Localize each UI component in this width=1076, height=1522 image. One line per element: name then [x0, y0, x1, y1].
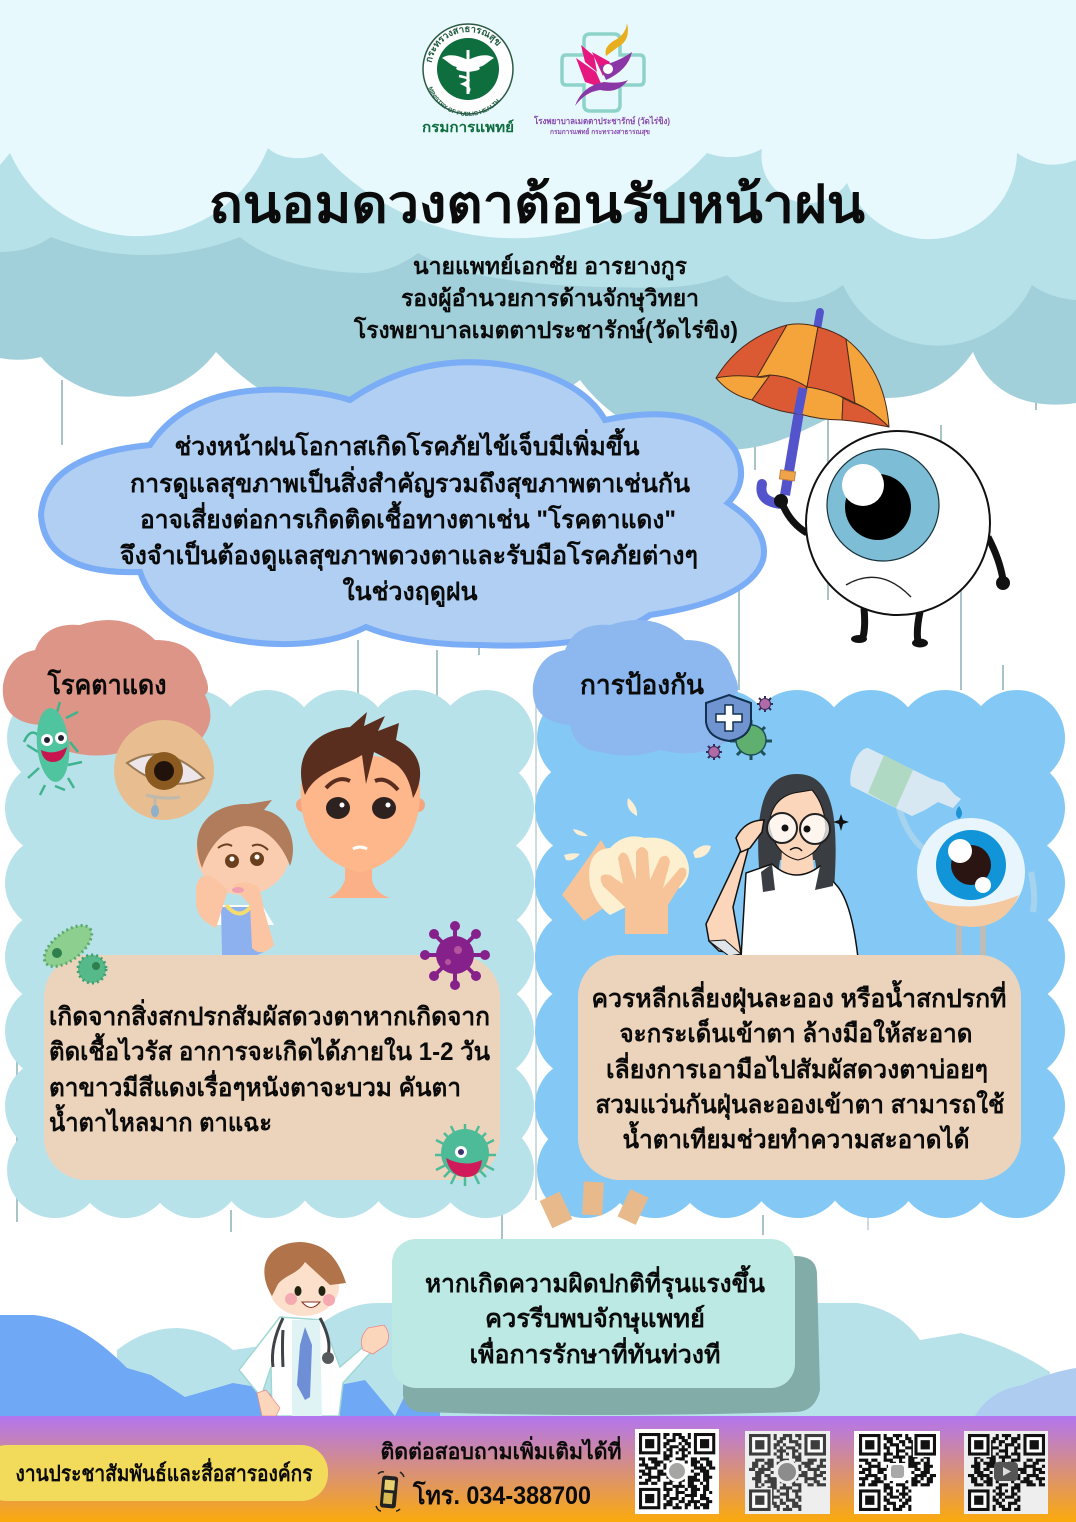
sky clouds: pale top layer [0, 0, 1076, 239]
QR code: Line [854, 1431, 940, 1514]
heading cloud: prevention [533, 620, 740, 756]
author text block: โรงพยาบาลเมตตาประชารักษ์(วัดไร่ขิง) [353, 316, 738, 343]
text box: prevention description: ควรหลีกเลี่ยงฝุ่นละออง หรือน้ำสกปรกที่ [592, 979, 1006, 1015]
logo: Ministry of Public Health: MINISTRY OF PUBLIC HEALTH [428, 86, 500, 116]
speech cloud: intro text: ในช่วงฤดูฝน [342, 576, 478, 608]
logo: Metta Pracharak hospital: กรมการแพทย์ กระทรวงสาธารณสุข [550, 127, 650, 136]
icon: purple virus [420, 921, 490, 990]
author text block: นายแพทย์เอกชัย อารยางกูร [413, 253, 688, 281]
illustration: doctor [239, 1242, 389, 1416]
icon: green monster virus [435, 1124, 496, 1186]
speech cloud: intro text: จึงจำเป็นต้องดูแลสุขภาพดวงตาและรับมือโรคภัยต่างๆ [120, 540, 698, 572]
panel: prevention [535, 690, 1065, 1218]
text box: conjunctivitis description: ติดเชื้อไวรัส อาการจะเกิดได้ภายใน 1-2 วัน [49, 1032, 490, 1066]
QR code: department website [635, 1429, 719, 1514]
heading cloud: conjunctivitis [3, 620, 210, 756]
text box: prevention description [578, 955, 1021, 1180]
decorative tan pieces [540, 1181, 648, 1228]
text box: prevention description: เลี่ยงการเอามือไปสัมผัสดวงตาบ่อยๆ [606, 1052, 988, 1084]
illustration: eye drop bottle and eye [850, 748, 1034, 958]
callout: see an ophthalmologist: เพื่อการรักษาที่ทันท่วงที [470, 1337, 720, 1369]
author text block [353, 253, 738, 343]
callout: see an ophthalmologist [392, 1239, 820, 1415]
logo: Metta Pracharak hospital [533, 23, 670, 136]
logo: Metta Pracharak hospital: โรงพยาบาลเมตตาประชารักษ์ (วัดไร่ขิง) [533, 115, 670, 126]
text box: conjunctivitis description [44, 955, 500, 1180]
decorative rain streaks [17, 360, 1036, 1245]
icon: shield with virus [706, 695, 773, 760]
logo: Ministry of Public Health: กระทรวงสาธารณสุข [426, 26, 501, 62]
text box: conjunctivitis description: น้ำตาไหลมาก ตาแฉะ [49, 1103, 272, 1137]
footer phone number: โทร. 034-388700 [412, 1480, 591, 1510]
heading cloud: conjunctivitis: โรคตาแดง [47, 668, 166, 700]
icon: green germ [24, 702, 82, 795]
sky clouds: dark layer [0, 0, 1076, 450]
logo: Ministry of Public Health [422, 23, 514, 135]
panel background scallops [535, 690, 1065, 1218]
title: ถนอมดวงตาต้อนรับหน้าฝน [209, 176, 865, 234]
panel: conjunctivitis [5, 690, 534, 1218]
text box: prevention description: จะกระเด็นเข้าตา ล้างมือให้สะอาด [620, 1018, 972, 1048]
text box: conjunctivitis description: เกิดจากสิ่งสกปรกสัมผัสดวงตาหากเกิดจาก [49, 999, 490, 1031]
footer contact text: ติดต่อสอบถามเพิ่มเติมได้ที่ [380, 1435, 622, 1464]
bottom hills [0, 1303, 1076, 1416]
speech cloud: intro text [41, 362, 764, 646]
icon: green bacteria [37, 918, 106, 983]
footer band [0, 1416, 1076, 1522]
heading cloud: prevention: การป้องกัน [580, 670, 705, 700]
illustration: adult face with sore eyes [296, 712, 425, 898]
text box: prevention description: น้ำตาเทียมช่วยทำความสะอาดได้ [622, 1120, 970, 1154]
speech cloud: intro text: ช่วงหน้าฝนโอกาสเกิดโรคภัยไข้เจ็บมีเพิ่มขึ้น [174, 427, 640, 461]
text box: conjunctivitis description: ตาขาวมีสีแดงเรื่อๆหนังตาจะบวม คันตา [49, 1070, 461, 1102]
callout: see an ophthalmologist: หากเกิดความผิดปกติที่รุนแรงขึ้น [425, 1264, 765, 1300]
icon: ringing phone [376, 1472, 404, 1511]
text box: prevention description: สวมแว่นกันฝุ่นละอองเข้าตา สามารถใช้ [596, 1089, 1005, 1121]
icon: red eye [114, 720, 214, 820]
footer pill: department name [0, 1445, 328, 1501]
speech cloud: intro text: อาจเสี่ยงต่อการเกิดติดเชื้อทางตาเช่น "โรคตาแดง" [140, 500, 676, 534]
panel background scallops [5, 690, 534, 1218]
sky clouds: middle layer [0, 0, 1076, 346]
illustration: woman with glasses [706, 774, 858, 958]
callout: see an ophthalmologist: ควรรีบพบจักษุแพทย์ [485, 1304, 705, 1335]
QR code: YouTube [964, 1431, 1048, 1514]
author text block: รองผู้อำนวยการด้านจักษุวิทยา [401, 285, 699, 313]
footer pill: department name: งานประชาสัมพันธ์และสื่อสารองค์กร [16, 1457, 313, 1486]
speech cloud: intro text: การดูแลสุขภาพเป็นสิ่งสำคัญรวมถึงสุขภาพตาเช่นกัน [130, 466, 690, 500]
illustration: child rubbing eyes [196, 800, 293, 958]
illustration: washing hands [562, 798, 711, 934]
icon: eyeball with umbrella [716, 312, 1010, 648]
QR code: Facebook [745, 1431, 830, 1514]
logo: Ministry of Public Health: กรมการแพทย์ [422, 119, 514, 135]
